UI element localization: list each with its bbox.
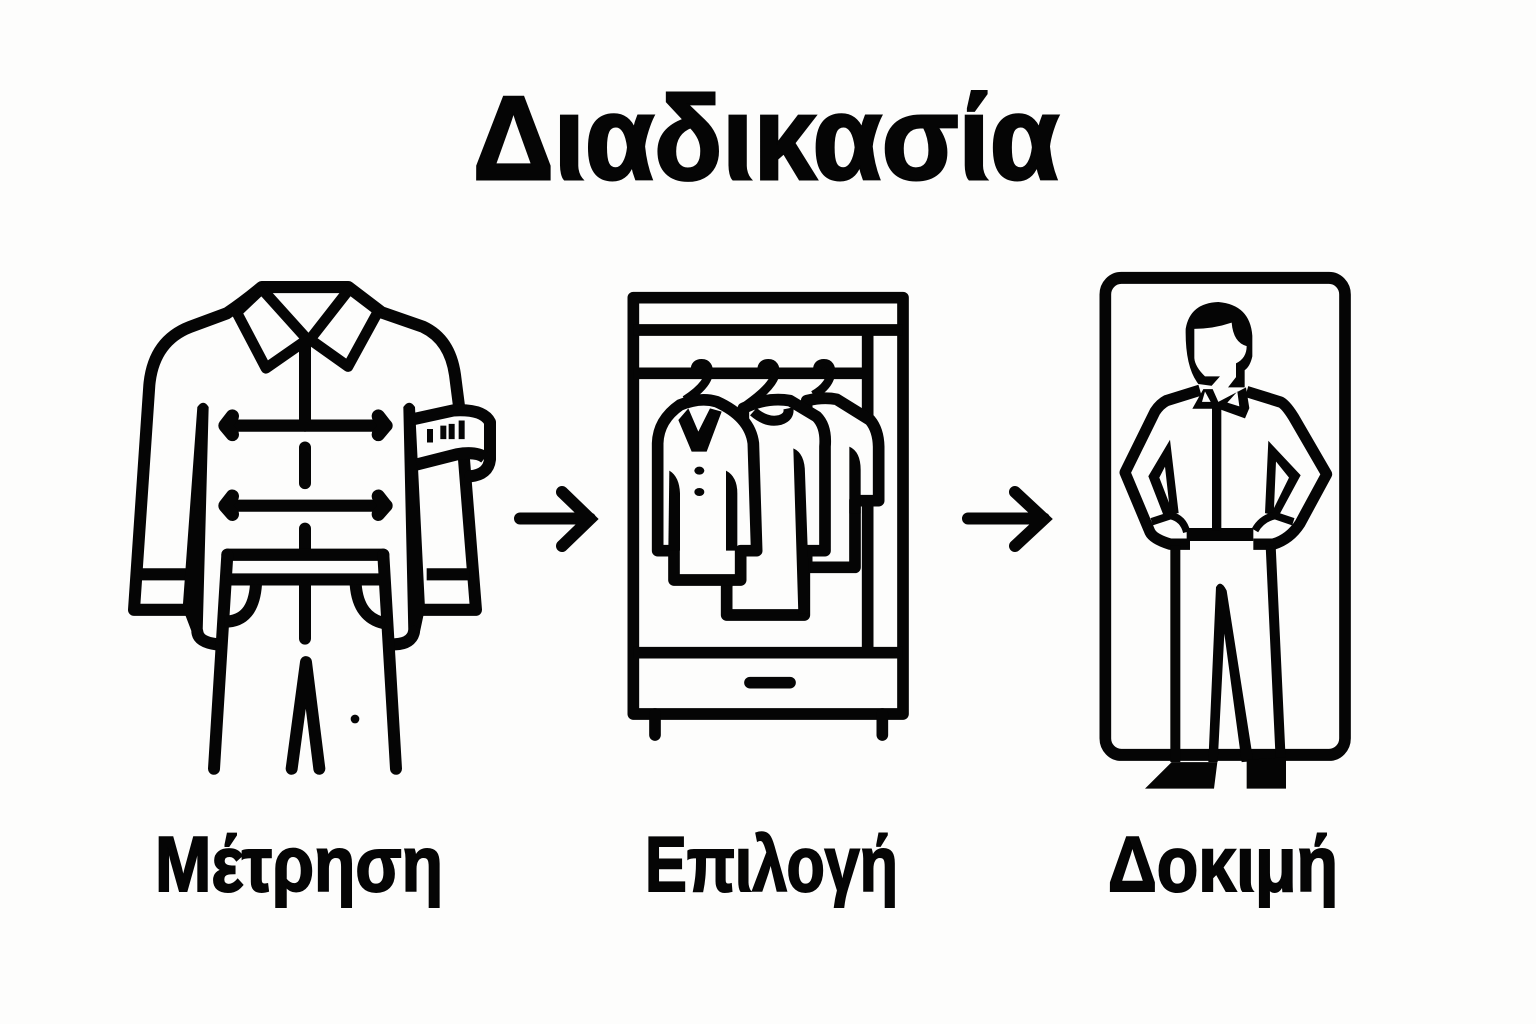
icon: clothes hangers — [685, 363, 831, 405]
icon: wardrobe with hanging clothes — [633, 298, 903, 735]
step label: fitting: Δοκιμή — [1108, 820, 1338, 908]
step label: selection: Επιλογή — [645, 820, 898, 908]
arrow: from selection to fitting — [968, 492, 1044, 546]
icon: person in front of a mirror — [1105, 278, 1345, 789]
step label: measurement: Μέτρηση — [155, 820, 443, 908]
icon: person trousers and shoes — [1145, 546, 1286, 789]
icon: hanging garments — [658, 398, 879, 615]
arrow: from measuring to selection — [520, 492, 590, 546]
icon: person shirt — [1125, 387, 1327, 544]
title: Διαδικασία — [473, 72, 1059, 205]
icon: jacket and trousers being measured — [134, 287, 490, 769]
icon: measuring tape on the sleeve — [415, 410, 490, 476]
icon: person head — [1186, 302, 1252, 398]
